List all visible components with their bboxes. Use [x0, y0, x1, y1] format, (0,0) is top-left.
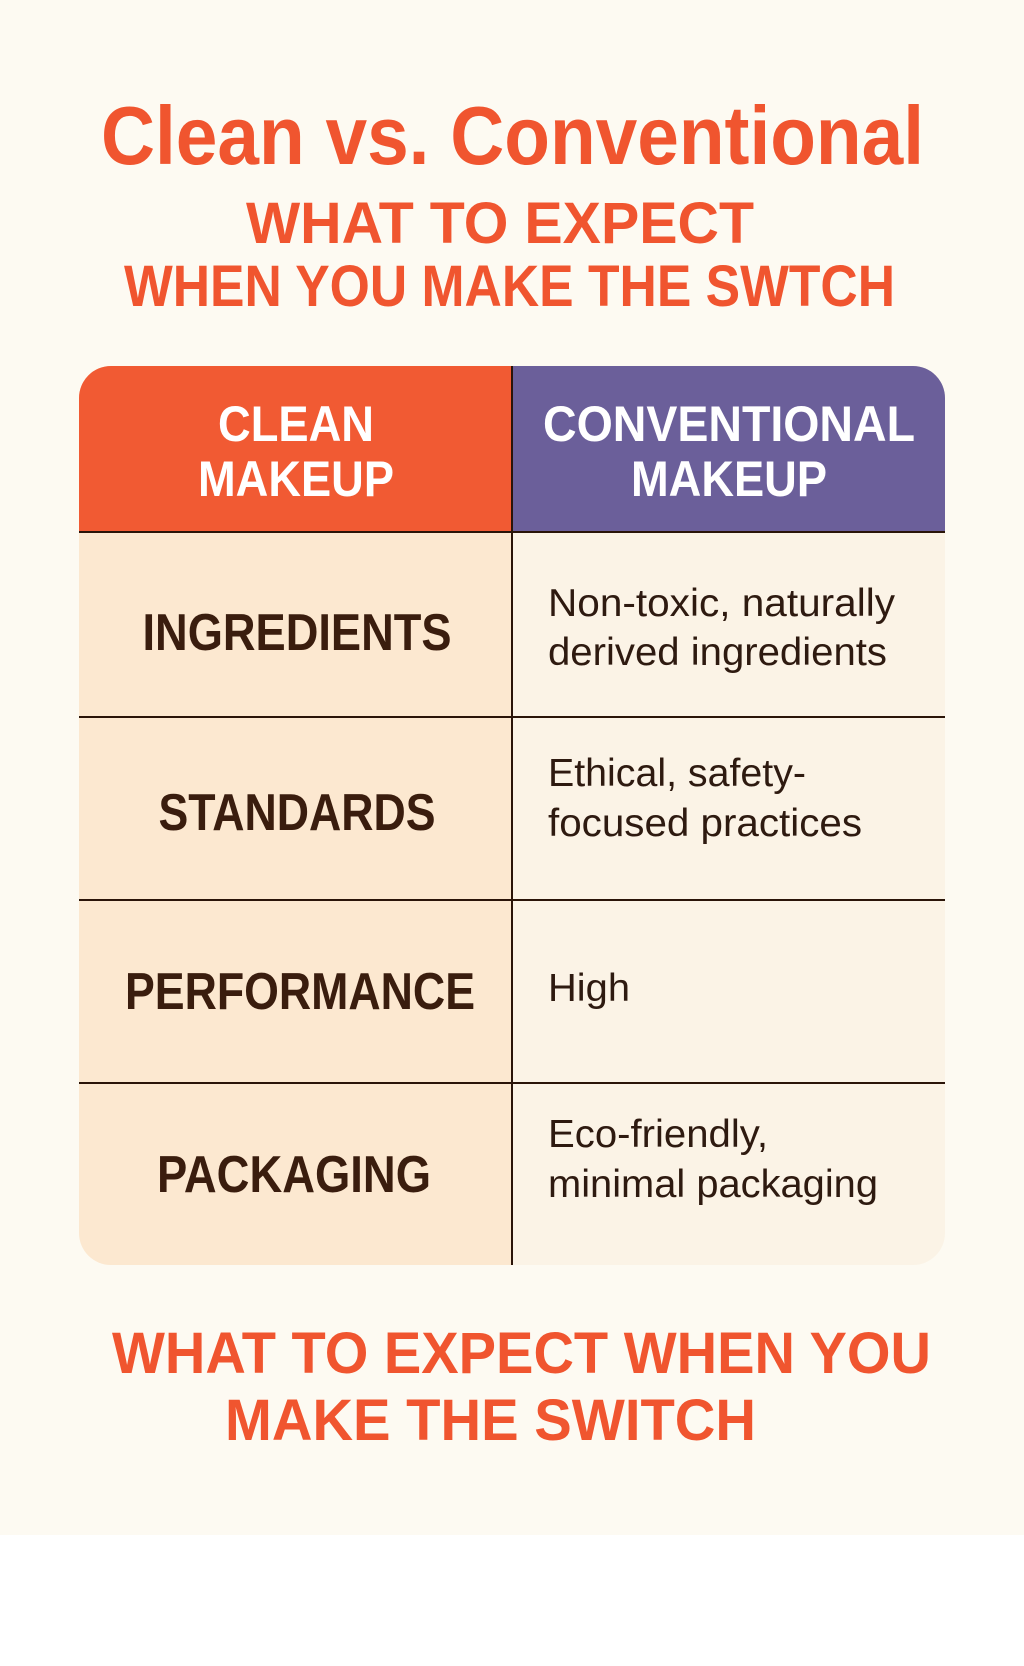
header: clean makeup: [198, 396, 394, 507]
header: conventional makeup: [543, 396, 915, 507]
footer heading: MAKE THE SWITCH: [225, 1388, 756, 1453]
row: packaging: [157, 1113, 878, 1206]
header: conventional makeup: MAKEUP: [631, 451, 827, 507]
row: packaging: PACKAGING: [157, 1146, 431, 1204]
header: clean makeup: CLEAN: [218, 396, 374, 452]
row: performance: PERFORMANCE: [125, 963, 475, 1021]
row: standards: [158, 752, 862, 845]
row: ingredients: derived ingredients: [548, 631, 887, 674]
subtitle: [124, 191, 895, 319]
row: ingredients: [142, 582, 896, 674]
comparison table: [79, 366, 945, 1265]
row: performance: High: [548, 967, 630, 1010]
header: clean makeup: MAKEUP: [198, 451, 394, 507]
row: standards: Ethical, safety-: [548, 752, 806, 795]
subtitle: WHEN YOU MAKE THE SWTCH: [124, 254, 895, 319]
footer heading: [112, 1321, 931, 1453]
subtitle: WHAT TO EXPECT: [246, 191, 754, 256]
footer heading: WHAT TO EXPECT WHEN YOU: [112, 1321, 931, 1386]
row: standards: STANDARDS: [158, 784, 436, 842]
row: ingredients: Non-toxic, naturally: [548, 582, 896, 625]
header: conventional makeup: CONVENTIONAL: [543, 396, 915, 452]
row: standards: focused practices: [548, 802, 862, 845]
row: packaging: Eco-friendly,: [548, 1113, 768, 1156]
row: ingredients: INGREDIENTS: [142, 604, 452, 662]
row: packaging: minimal packaging: [548, 1163, 878, 1206]
title: Clean vs. Conventional: [101, 89, 924, 182]
